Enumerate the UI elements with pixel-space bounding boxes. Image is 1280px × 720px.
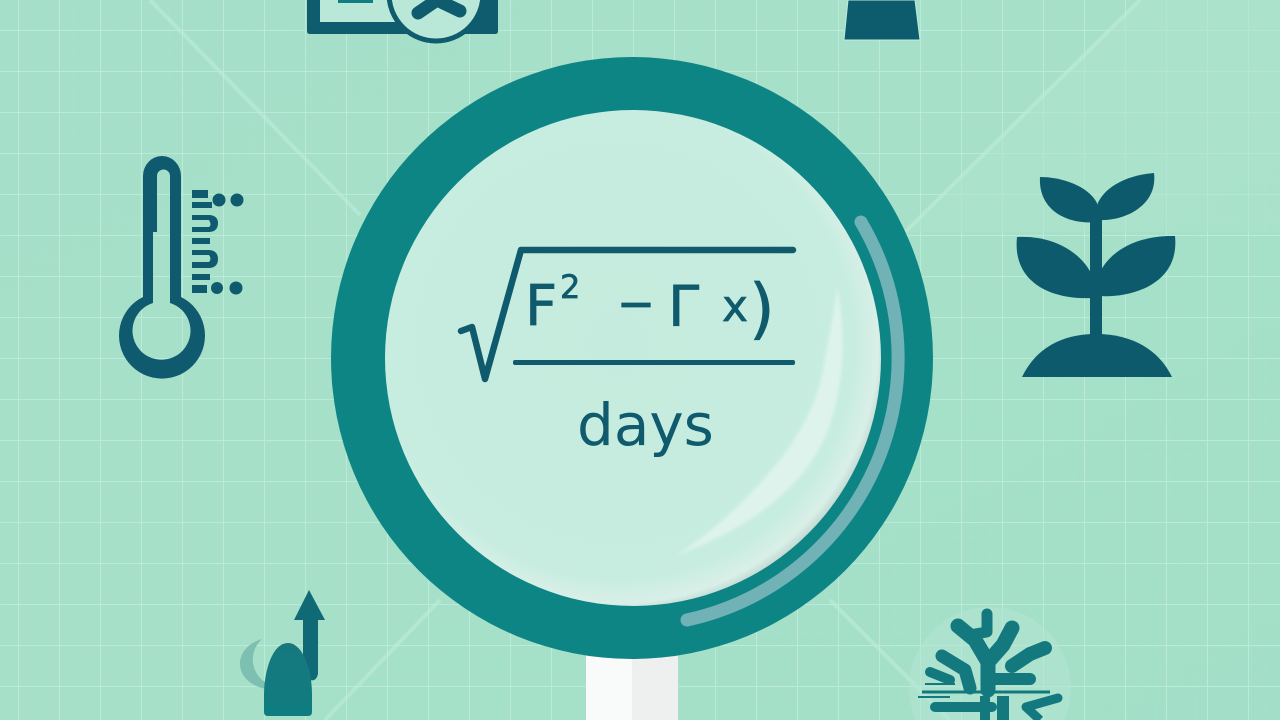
icon: growth arrow and hump bbox=[240, 590, 325, 716]
icon: sprout plant bbox=[1017, 173, 1175, 377]
magnifying glass bbox=[331, 57, 933, 720]
thermometer body bbox=[119, 156, 205, 379]
faded crescent bbox=[240, 639, 268, 689]
icon: thermometer bbox=[119, 156, 244, 379]
top leaves bbox=[1040, 177, 1097, 222]
numerator bbox=[525, 268, 775, 347]
stem bbox=[1090, 205, 1102, 340]
formula bbox=[461, 250, 795, 459]
lens glare bbox=[677, 287, 843, 555]
denominator: days bbox=[577, 391, 714, 459]
radical sign bbox=[461, 250, 793, 379]
thermometer scale bbox=[192, 190, 244, 294]
numerator: — bbox=[620, 284, 652, 322]
middle leaves bbox=[1017, 237, 1092, 298]
ring highlight bbox=[687, 222, 898, 620]
numerator: ) bbox=[749, 270, 775, 347]
hump bbox=[264, 643, 312, 716]
icon: bell base, cropped at top bbox=[844, 0, 920, 40]
fraction bar bbox=[513, 360, 795, 365]
numerator: x bbox=[722, 281, 748, 332]
arrow bbox=[294, 590, 325, 680]
icon: branching circuit tree bbox=[909, 607, 1071, 720]
soil mound bbox=[1022, 334, 1172, 377]
lens bbox=[385, 110, 881, 606]
numerator: Γ bbox=[668, 275, 699, 340]
numerator: F bbox=[525, 274, 557, 339]
icon: image with x lens, cropped at top bbox=[307, 0, 498, 41]
numerator: 2 bbox=[560, 268, 580, 306]
handle bbox=[586, 650, 678, 720]
ring bbox=[331, 57, 933, 659]
